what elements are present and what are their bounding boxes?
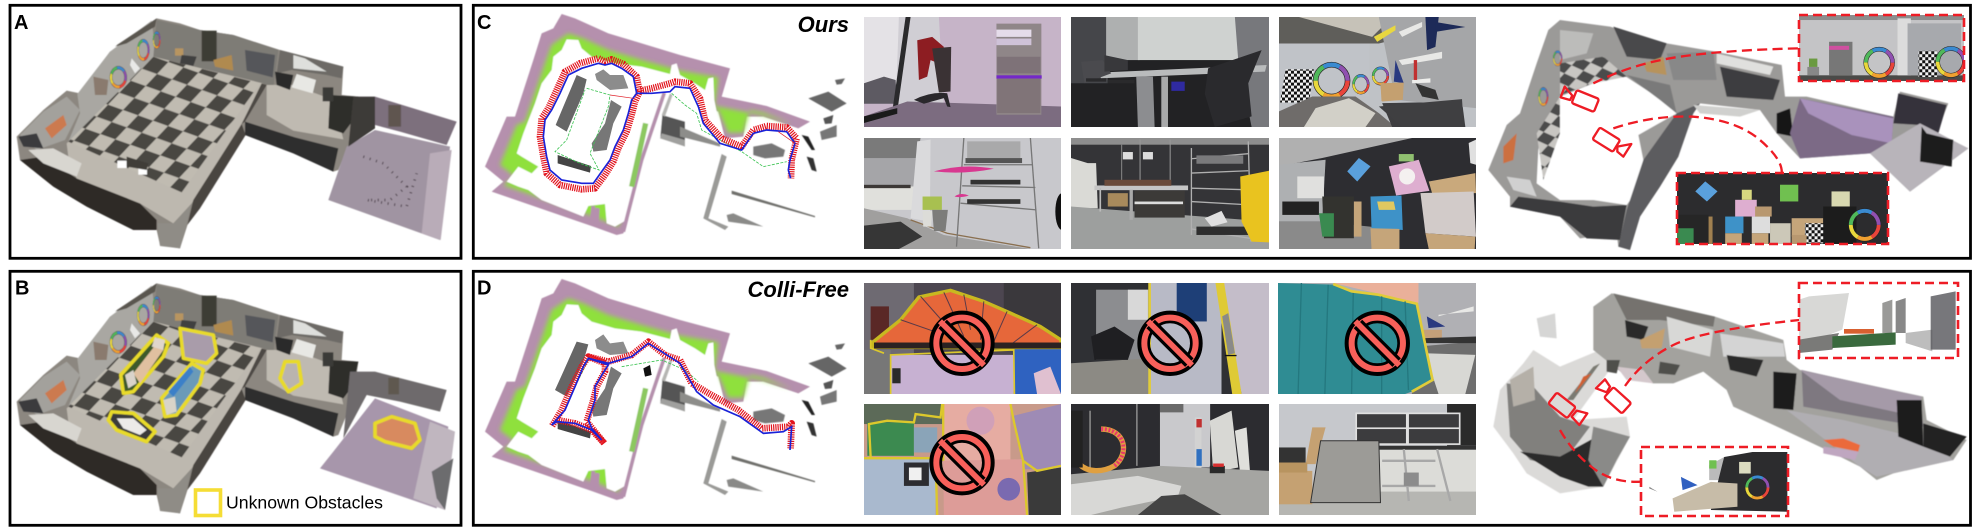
photo C5: workbench and yellow cabinet: [1071, 138, 1269, 249]
inset: top reconstruction view D: [1799, 291, 1956, 353]
photo C2: dark meeting room: [1071, 17, 1269, 127]
navigation map D: [485, 279, 847, 500]
inset: top reconstruction view C: [1799, 15, 1964, 81]
panel A 3D scene: [17, 18, 457, 248]
photo D2: blocked door panel: [1071, 283, 1269, 394]
no-entry icon 4: [936, 436, 988, 489]
photo C1: elevator hallway with robot arm: [864, 17, 1061, 127]
dashed inset frame bottom C: [1677, 173, 1888, 244]
no-entry icon 3: [1351, 317, 1404, 370]
camera path lines and camera icons C: [1561, 48, 1799, 174]
label B: B: [15, 278, 29, 300]
label A: A: [14, 12, 28, 34]
heading: Colli-Free: Colli-Free: [748, 277, 849, 302]
camera path lines and camera icons D: [1548, 320, 1799, 482]
inset: bottom reconstruction view C: [1677, 173, 1888, 244]
dashed inset frame top C: [1799, 15, 1964, 81]
panel: C: [473, 5, 1970, 258]
photo C4: metal shelf with pink umbrella: [864, 138, 1061, 249]
3D reconstruction D: [1493, 293, 1967, 493]
label C: C: [477, 12, 491, 34]
navigation map C: [485, 14, 847, 235]
photo D4: colourful foam mats: [864, 404, 1061, 515]
panel: D: [473, 271, 1970, 525]
no-entry icons over photos: [936, 317, 1404, 489]
camera 1: [1548, 392, 1587, 425]
photo D3: teal curtain: [1278, 283, 1476, 394]
photo D5: ring in dark corridor: [1071, 404, 1269, 515]
camera 2: [1596, 379, 1631, 414]
photo D6: grey mat leaning on shelf: [1279, 404, 1476, 515]
dashed projection lines: [1560, 320, 1799, 482]
label D: D: [477, 278, 491, 300]
legend: unknown obstacles: Unknown Obstacles: [226, 492, 383, 512]
dashed inset frame bottom D: [1641, 447, 1788, 516]
unknown obstacle highlights: [108, 328, 420, 448]
photo C3: rainbow rings and model planes: [1279, 17, 1476, 127]
panel: A: [10, 5, 461, 258]
camera 1: [1561, 87, 1599, 112]
photo C6: foam mats and hello kitty board: [1279, 138, 1476, 249]
dashed projection lines: [1593, 48, 1799, 174]
no-entry icon 2: [1144, 317, 1196, 370]
photo D1: orange duct: [864, 283, 1061, 394]
inset: bottom reconstruction view D: [1649, 452, 1788, 512]
panel B 3D scene: [17, 283, 455, 513]
heading: Ours: Ours: [798, 12, 849, 37]
3D reconstruction C: [1488, 20, 1968, 250]
legend: unknown obstacles: [196, 490, 383, 516]
panel: B: [10, 271, 461, 525]
no-entry icon 1: [936, 317, 988, 370]
camera 2: [1592, 127, 1631, 157]
dashed inset frame top D: [1799, 283, 1958, 358]
